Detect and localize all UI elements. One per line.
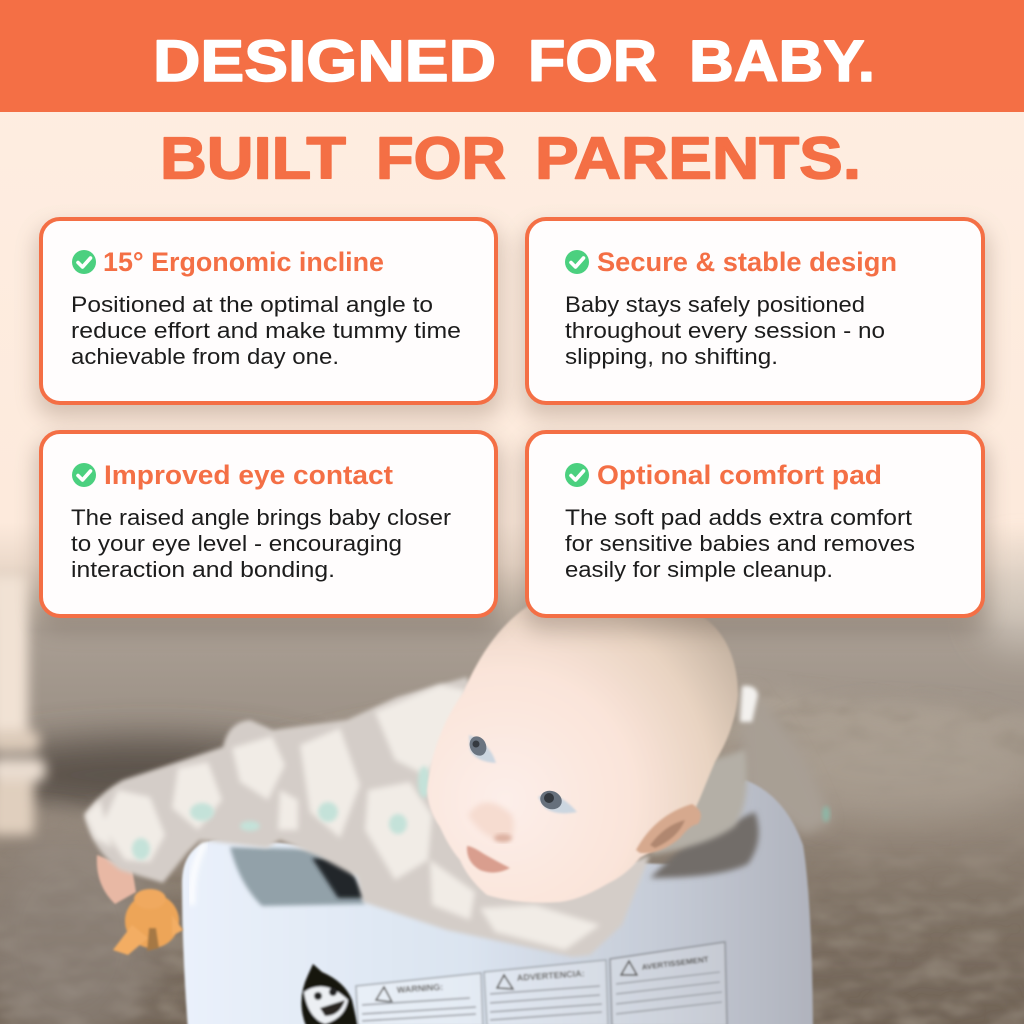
heading: 15° Ergonomic incline [103, 247, 384, 277]
body text: achievable from day one. [71, 344, 339, 369]
body text: The soft pad adds extra comfort [565, 505, 913, 530]
seat warning labels [356, 942, 727, 1024]
title line 1: DESIGNED [153, 29, 496, 94]
baby back behind head [650, 750, 747, 855]
body text: reduce effort and make tummy time [71, 318, 461, 343]
seat body [182, 780, 813, 1024]
seat warning labels: WARNING: [396, 982, 444, 995]
icon: check [72, 463, 96, 487]
seat interior [230, 847, 365, 906]
body text: The raised angle brings baby closer [71, 505, 452, 530]
title line 1 [153, 29, 875, 94]
body text: throughout every session - no [565, 318, 885, 343]
baby hand [97, 855, 136, 904]
heading: Optional comfort pad [597, 460, 882, 490]
seat warning labels: AVERTISSEMENT [641, 955, 709, 972]
title line 2: BUILT [160, 126, 346, 192]
header banner [0, 0, 1024, 112]
body text [71, 292, 461, 369]
baby far sleeve [738, 688, 832, 835]
photo: cream table leg [0, 575, 46, 835]
body text: easily for simple cleanup. [565, 557, 833, 582]
panel: 15 degree ergonomic incline [36, 219, 502, 418]
onesie print [85, 685, 600, 950]
onesie arm and torso [85, 677, 650, 957]
baby ear [636, 804, 701, 853]
body text: slipping, no shifting. [565, 344, 778, 369]
toy elephant [113, 889, 183, 955]
panel: improved eye contact [36, 432, 502, 631]
panel: optional comfort pad [522, 432, 989, 631]
seat logo penguin [301, 964, 358, 1024]
body text: for sensitive babies and removes [565, 531, 915, 556]
baby nose and mouth [467, 802, 514, 873]
heading: Improved eye contact [104, 460, 393, 490]
title line 1: BABY. [689, 29, 875, 94]
seat rim highlight [192, 842, 205, 905]
baby eyes [467, 734, 577, 813]
heading: Secure & stable design [597, 247, 897, 277]
seat warning labels: ADVERTENCIA: [516, 968, 585, 983]
body text: interaction and bonding. [71, 557, 335, 582]
panel: secure and stable design [522, 219, 989, 418]
body text: to your eye level - encouraging [71, 531, 402, 556]
icon: check [565, 250, 589, 274]
body text [565, 292, 885, 369]
body text [565, 505, 915, 582]
icon: check [565, 463, 589, 487]
icon: check [72, 250, 96, 274]
photo: baby and seat [85, 601, 832, 1024]
photo: room and carpet [0, 550, 1024, 1024]
body text: Baby stays safely positioned [565, 292, 865, 317]
title line 2: FOR [376, 126, 506, 192]
title line 2: PARENTS. [535, 126, 861, 192]
title line 1: FOR [528, 29, 657, 94]
body text [71, 505, 452, 582]
body text: Positioned at the optimal angle to [71, 292, 433, 317]
baby head [427, 601, 738, 903]
title line 2 [160, 126, 861, 192]
